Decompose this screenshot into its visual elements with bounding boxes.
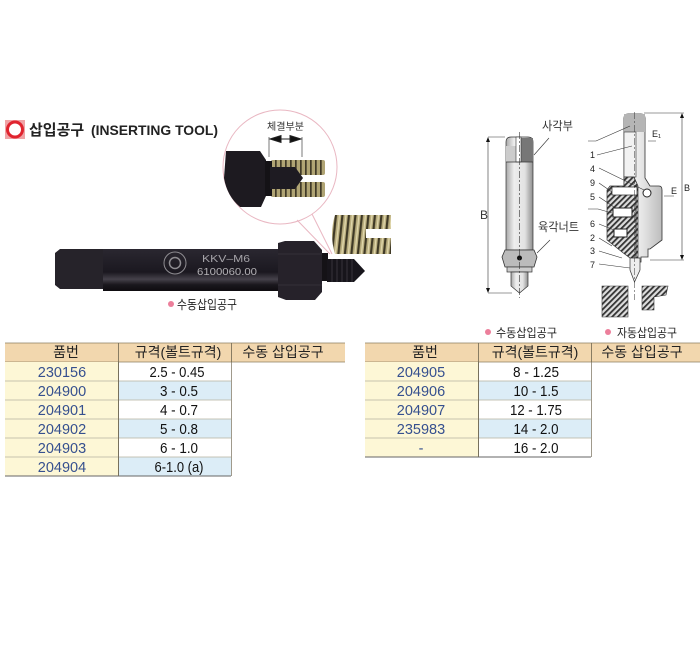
specifications: 5 - 0.8 (160, 422, 198, 438)
table: right (365, 343, 700, 457)
specifications: 10 - 1.5 (514, 384, 558, 400)
part numbers: 5 (590, 192, 595, 202)
part numbers: 2 (590, 233, 595, 243)
part numbers: 6 (590, 219, 595, 229)
header row (5, 343, 345, 362)
tool head detail (224, 151, 303, 207)
specifications: 8 - 1.25 (513, 365, 559, 381)
diagram: manual tool drawing (480, 119, 579, 298)
specifications (510, 365, 562, 457)
header row: 수동 삽입공구 (601, 344, 683, 360)
body cells (5, 362, 118, 476)
diagram: automatic tool drawing (588, 112, 690, 317)
icon: red ring logo (5, 120, 25, 139)
specifications: 2.5 - 0.45 (150, 365, 204, 381)
table: left (5, 343, 345, 476)
label: square part: 사각부 (542, 119, 573, 133)
header row (365, 343, 700, 362)
part numbers (397, 365, 445, 457)
part numbers: 1 (590, 150, 595, 160)
part numbers: 230156 (38, 365, 86, 381)
label: fastening section: 체결부분 (267, 121, 304, 133)
specifications: 6-1.0 (a) (154, 460, 204, 476)
title: (INSERTING TOOL) (91, 122, 218, 138)
part numbers: 204905 (397, 365, 445, 381)
body cells (365, 362, 478, 457)
insert thread detail (271, 160, 325, 197)
part numbers: 204903 (38, 441, 86, 457)
part numbers: 204900 (38, 384, 86, 400)
header row: 수동 삽입공구 (242, 344, 324, 360)
caption: manual tool drawing: 수동삽입공구 (496, 326, 557, 340)
label: hex nut: 육각너트 (538, 220, 579, 234)
part numbers: 9 (590, 178, 595, 188)
title: 삽입공구 (29, 122, 84, 139)
part numbers (590, 129, 690, 270)
caption: manual tool: 수동삽입공구 (177, 298, 237, 312)
manual inserting tool photo: 6100060.00 (197, 266, 257, 278)
manual inserting tool photo (55, 241, 365, 300)
detail magnifier circle (223, 110, 337, 254)
part numbers: E₁ (652, 129, 661, 139)
specifications (150, 365, 204, 476)
dimension arrow (269, 136, 302, 157)
part numbers: E (671, 186, 677, 196)
specifications: 14 - 2.0 (514, 422, 558, 438)
specifications: 12 - 1.75 (510, 403, 562, 419)
header row: 품번 (53, 344, 79, 360)
part numbers: B (684, 183, 690, 193)
specifications: 3 - 0.5 (160, 384, 198, 400)
part numbers: 204902 (38, 422, 86, 438)
part numbers: 204906 (397, 384, 445, 400)
part numbers: 4 (590, 164, 595, 174)
part numbers: 204907 (397, 403, 445, 419)
part numbers (38, 365, 86, 476)
callout leader lines (588, 126, 674, 268)
header row: 규격(볼트규격) (135, 344, 221, 360)
specifications: 16 - 2.0 (514, 441, 558, 457)
specifications: 4 - 0.7 (160, 403, 198, 419)
part numbers: - (419, 441, 424, 457)
part numbers: 204904 (38, 460, 86, 476)
part numbers: 235983 (397, 422, 445, 438)
specifications: 6 - 1.0 (160, 441, 198, 457)
part numbers: 7 (590, 260, 595, 270)
header row: 품번 (412, 344, 438, 360)
part numbers: 204901 (38, 403, 86, 419)
loose thread insert (332, 215, 391, 254)
header row: 규격(볼트규격) (492, 344, 578, 360)
part numbers: 3 (590, 246, 595, 256)
engraved text: KKV–M6 (202, 254, 251, 265)
engraved logo (164, 252, 186, 274)
caption: automatic tool drawing: 자동삽입공구 (617, 326, 677, 340)
label: B: B (480, 208, 488, 222)
